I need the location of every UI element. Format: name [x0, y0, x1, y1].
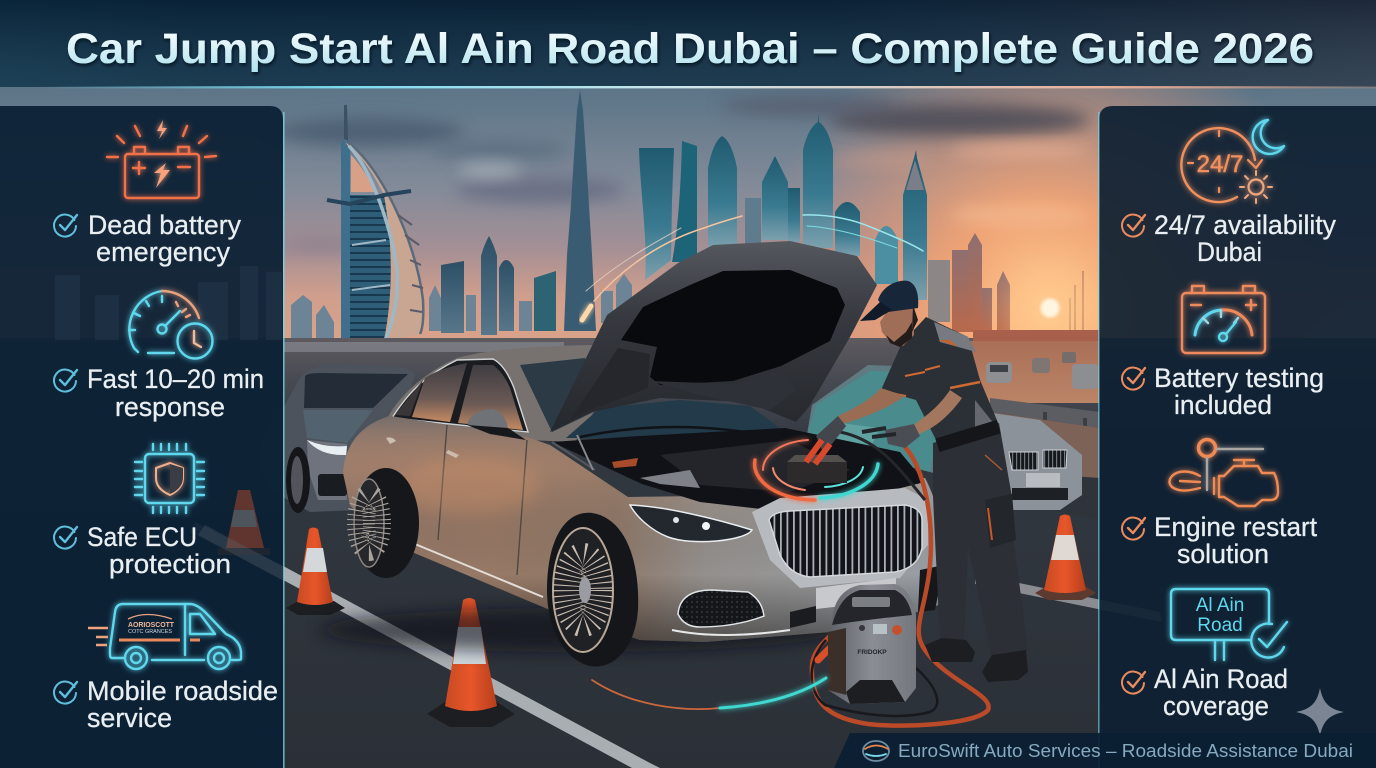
- car body: [343, 416, 946, 642]
- item: engine restart: [1122, 512, 1317, 569]
- item: dead battery emergency: [54, 210, 241, 267]
- wheels: [353, 468, 638, 667]
- Burj Khalifa: [564, 90, 596, 331]
- faded cone behind panel: [218, 490, 270, 555]
- sparkle mark: [1296, 688, 1344, 736]
- Burj Al Arab: [327, 105, 423, 340]
- item: battery testing: [1122, 363, 1324, 420]
- teal reflective car: [806, 365, 990, 490]
- icon: Al Ain Road sign: Al Ain: [1196, 595, 1244, 616]
- sun: [1010, 268, 1090, 348]
- background scene: sky: [0, 0, 1376, 400]
- far arm: [838, 388, 905, 424]
- icon: ECU chip shield: [135, 444, 204, 513]
- item: dead battery emergency: Dead battery: [88, 210, 241, 240]
- item: 24/7 availability: Dubai: [1197, 237, 1262, 267]
- item: safe ECU: protection: [109, 549, 231, 579]
- item: Al Ain Road coverage: Al Ain Road: [1154, 664, 1288, 694]
- title: Car Jump Start Al Ain Road Dubai – Complete Guide 2026: [66, 25, 1314, 73]
- item: battery testing: included: [1174, 390, 1272, 420]
- icon: Al Ain Road sign: Road: [1197, 615, 1243, 636]
- rear left car: [260, 365, 415, 513]
- left side panel: [0, 106, 285, 768]
- headlight: [630, 505, 752, 542]
- icon: Al Ain Road sign: [1171, 589, 1287, 660]
- roof and windows: [388, 345, 625, 442]
- shoes: [925, 638, 975, 662]
- footer brand bar: [834, 733, 1376, 768]
- grey BMW: [985, 412, 1082, 510]
- item: mobile roadside service: [54, 676, 278, 733]
- item: safe ECU: [54, 522, 231, 579]
- main silver car: [320, 241, 946, 667]
- road: [0, 330, 1376, 768]
- item: fast response: Fast 10–20 min: [87, 364, 264, 394]
- mechanic: [806, 281, 1028, 682]
- portable jump starter: [828, 584, 916, 704]
- right side panel: [1098, 106, 1376, 768]
- energy trails in sky: [582, 215, 923, 320]
- twisted glass towers: [639, 114, 927, 300]
- title banner: [0, 0, 1376, 88]
- cone left: [286, 528, 345, 615]
- icon: key and engine: [1170, 440, 1278, 506]
- cone front: [427, 598, 515, 727]
- item: fast response: [54, 364, 264, 422]
- pack label: FRIDOKP: [857, 649, 887, 656]
- item: 24/7 availability: 24/7 availability: [1154, 210, 1336, 240]
- item: mobile roadside service: Mobile roadside: [87, 676, 278, 706]
- icon: battery test gauge: [1182, 286, 1265, 353]
- icon: service van: COTC GRANCES: [128, 629, 173, 635]
- icon: service van: [88, 604, 241, 669]
- side mirror: [467, 409, 525, 438]
- bumper details: [678, 590, 764, 627]
- icon: 24/7 clock with moon and sun: 24/7: [1197, 151, 1243, 178]
- item: engine restart: Engine restart: [1154, 512, 1317, 542]
- item: dead battery emergency: emergency: [96, 237, 230, 267]
- near arm: [912, 390, 962, 434]
- icon: speedometer with clock: [129, 291, 212, 358]
- icon: dead battery: [107, 120, 216, 198]
- energy swooshes: [592, 678, 826, 709]
- skyline: [291, 90, 1083, 340]
- item: safe ECU: Safe ECU: [87, 522, 197, 552]
- item: 24/7 availability: [1122, 210, 1336, 267]
- item: Al Ain Road coverage: [1122, 664, 1288, 721]
- trousers: [933, 423, 1028, 657]
- icon: 24/7 clock with moon and sun: [1181, 120, 1284, 203]
- clamps: [862, 428, 896, 437]
- jump cables: [812, 432, 989, 726]
- footer brand bar: EuroSwift Auto Services – Roadside Assistance Dubai: [898, 740, 1353, 761]
- item: fast response: response: [115, 392, 225, 422]
- head and cap: [880, 305, 914, 346]
- rear right cars: [806, 365, 1082, 510]
- energy rings around battery: [755, 440, 878, 500]
- traffic cones: [286, 514, 1096, 727]
- item: battery testing: Battery testing: [1154, 363, 1324, 393]
- item: Al Ain Road coverage: coverage: [1163, 691, 1269, 721]
- hood: [550, 241, 877, 470]
- engine bay: [552, 428, 925, 510]
- brand logo: [863, 741, 889, 761]
- icon: service van: AORIOSCOTT: [128, 622, 175, 629]
- cone right: [1035, 514, 1096, 600]
- car shadow: [320, 608, 840, 652]
- windshield under hood: [566, 400, 785, 438]
- item: mobile roadside service: service: [87, 703, 172, 733]
- front bonnet lip and grille: [752, 488, 928, 588]
- item: engine restart: solution: [1177, 539, 1269, 569]
- torso: [881, 317, 999, 442]
